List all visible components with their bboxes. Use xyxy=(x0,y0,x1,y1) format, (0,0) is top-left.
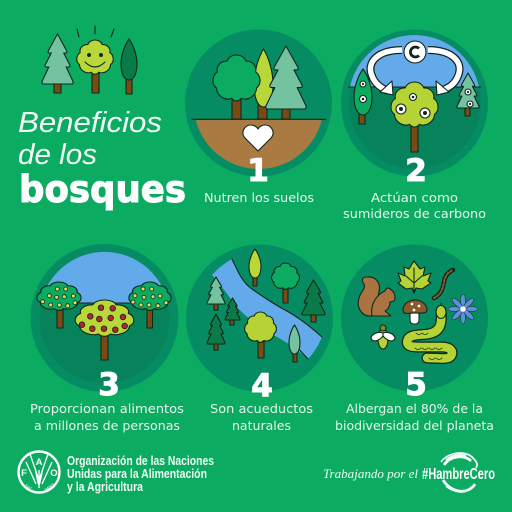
FAO name: Organización de las Naciones xyxy=(67,454,214,468)
fruit trees xyxy=(37,282,171,360)
caption 4: Son acueductos xyxy=(210,401,313,416)
panel 1: soils xyxy=(185,30,332,205)
title xyxy=(18,107,186,211)
caption 5 xyxy=(335,401,494,433)
FAO logo: A xyxy=(36,457,43,468)
caption 1: Nutren los suelos xyxy=(204,190,314,205)
caption 5: Albergan el 80% de la xyxy=(346,401,483,416)
icon: bee xyxy=(371,325,395,349)
caption 2: sumideros de carbono xyxy=(343,206,486,221)
sky xyxy=(41,252,168,303)
icon: flower xyxy=(448,294,478,324)
forest xyxy=(207,249,325,362)
title: bosques xyxy=(19,168,186,211)
caption 2: Actúan como xyxy=(371,190,458,205)
FAO name xyxy=(67,454,214,494)
FAO logo: F xyxy=(21,468,27,479)
caption 3: Proporcionan alimentos xyxy=(30,401,184,416)
icon: maple leaf xyxy=(398,261,431,293)
river xyxy=(212,259,322,359)
FAO logo: PANIS xyxy=(44,482,55,492)
arrows xyxy=(370,50,460,95)
title: Beneficios xyxy=(18,107,162,139)
number 4: 4 xyxy=(251,368,273,404)
number 5: 5 xyxy=(405,367,427,403)
trees xyxy=(354,69,479,152)
icon: three smiling trees xyxy=(42,26,137,94)
FAO logo: FIAT xyxy=(24,483,33,491)
FAO logo xyxy=(18,452,60,492)
trees xyxy=(192,46,326,119)
caption 3 xyxy=(30,401,184,433)
number 1: 1 xyxy=(247,153,269,189)
icon: snake xyxy=(407,303,452,360)
sky xyxy=(350,35,479,87)
caption 3: a millones de personas xyxy=(34,418,180,433)
panel 2: carbon sinks xyxy=(341,30,488,221)
FAO logo: O xyxy=(50,468,58,479)
FAO name: Unidas para la Alimentación xyxy=(67,467,207,481)
number 3: 3 xyxy=(98,367,120,403)
soil xyxy=(196,119,322,169)
icon: heart xyxy=(243,125,273,151)
icon: squirrel xyxy=(358,277,395,316)
carbon symbol xyxy=(404,41,426,63)
slogan: Trabajando por el xyxy=(323,466,418,481)
FAO name: y la Agricultura xyxy=(67,480,144,494)
caption 4: naturales xyxy=(232,418,291,433)
slogan xyxy=(323,466,495,483)
caption 4 xyxy=(210,401,313,433)
panel 3: food xyxy=(30,244,184,433)
icon: mushroom xyxy=(403,300,427,324)
caption 2 xyxy=(343,190,486,221)
title: de los xyxy=(18,139,97,171)
panel 4: aqueducts xyxy=(186,244,333,433)
panel 5: biodiversity xyxy=(335,244,494,433)
caption 5: biodiversidad del planeta xyxy=(335,418,494,433)
icon: worm xyxy=(434,270,453,298)
number 2: 2 xyxy=(405,153,427,189)
icon: Hambre Cero swirl xyxy=(441,453,477,492)
